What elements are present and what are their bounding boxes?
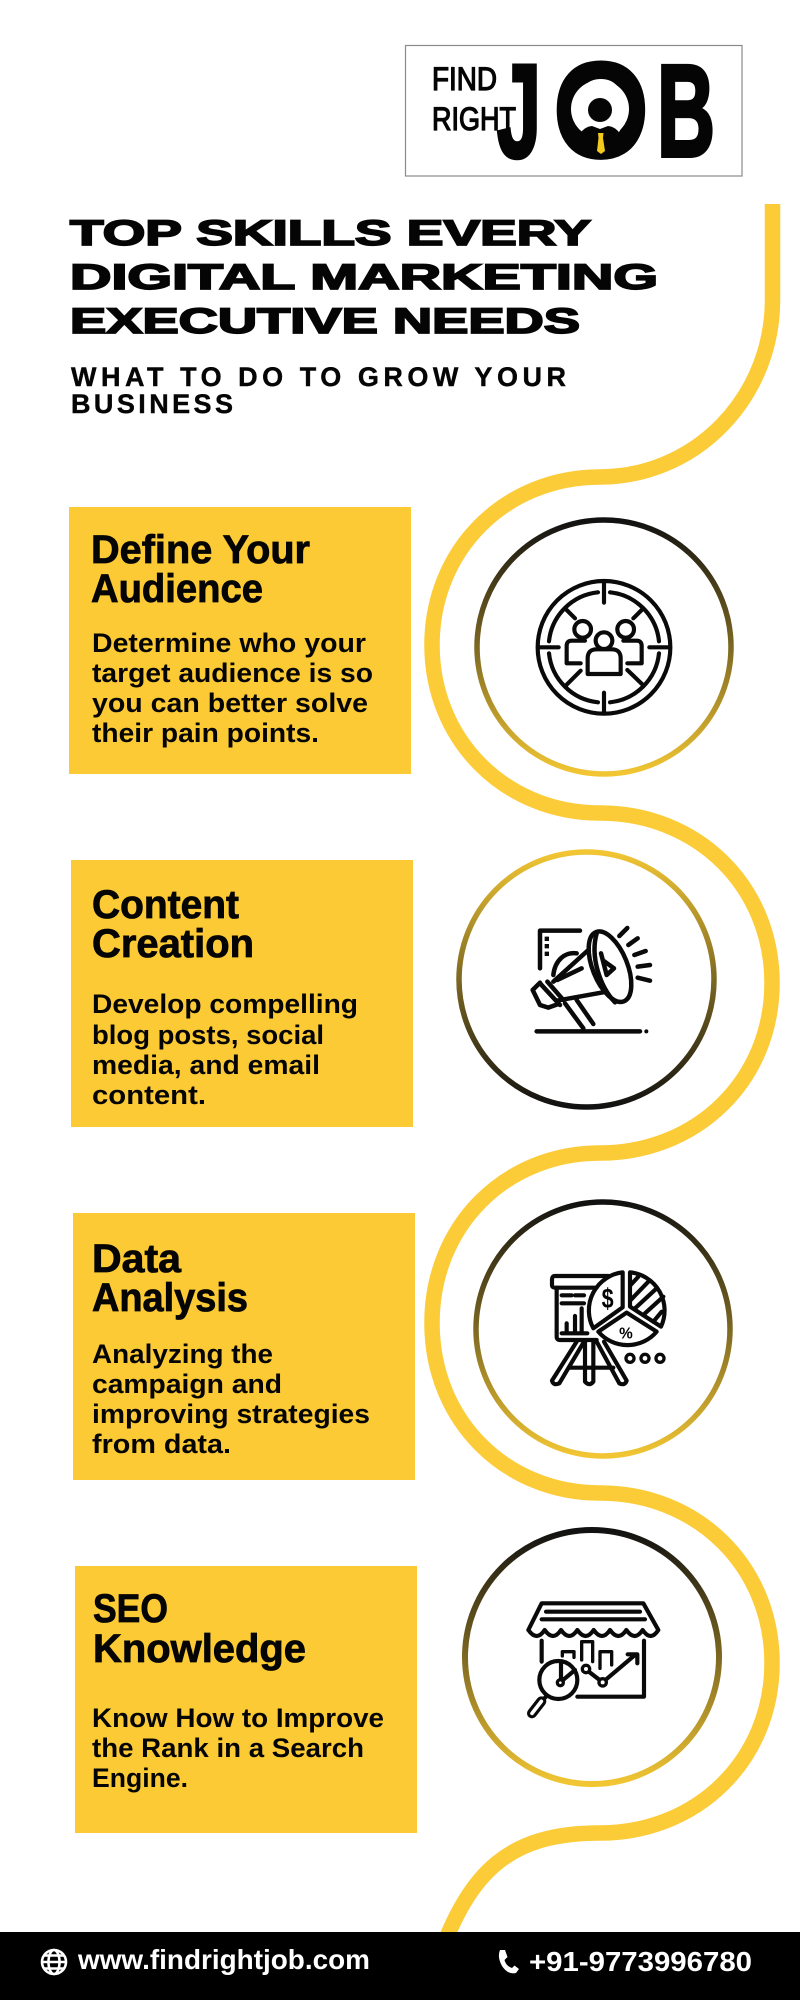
- circle: define your audience: [477, 520, 731, 774]
- body text: define your audience: you can better solve: [92, 688, 368, 718]
- logo wordmark: job: J: [497, 38, 541, 186]
- icon: phone: [499, 1950, 519, 1973]
- body text: content creation: blog posts, social: [92, 1020, 324, 1050]
- body text: define your audience: Determine who your: [92, 628, 367, 658]
- logo text: find right: [432, 61, 516, 137]
- body text: seo knowledge: the Rank in a Search: [92, 1733, 364, 1763]
- subtitle: WHAT TO DO TO GROW YOUR: [71, 362, 566, 392]
- body text: content creation: [92, 989, 358, 1110]
- body text: data analysis: [92, 1339, 370, 1459]
- body text: data analysis: from data.: [92, 1429, 231, 1459]
- icon: store with analytics: [528, 1603, 658, 1713]
- heading: content creation: [92, 883, 254, 966]
- body text: define your audience: target audience is so: [92, 658, 373, 688]
- body text: content creation: media, and email: [92, 1050, 320, 1080]
- logo wordmark: job: B: [657, 37, 715, 184]
- body text: data analysis: campaign and: [92, 1369, 282, 1399]
- body text: seo knowledge: Engine.: [92, 1763, 188, 1793]
- body text: seo knowledge: Know How to Improve: [92, 1703, 384, 1733]
- heading: data analysis: [92, 1237, 248, 1320]
- panel: data analysis: [73, 1213, 415, 1480]
- circle: seo knowledge: [465, 1530, 719, 1784]
- icon: target audience: [538, 581, 670, 714]
- circle: data analysis: [476, 1202, 730, 1456]
- panel: content creation: [71, 860, 413, 1127]
- title: EXECUTIVE NEEDS: [70, 302, 580, 341]
- heading: content creation: Content: [92, 883, 239, 927]
- icon: presentation board with pie chart: %: [619, 1325, 633, 1342]
- body text: define your audience: [92, 628, 373, 748]
- icon: presentation board with pie chart: $: [602, 1283, 614, 1314]
- heading: seo knowledge: Knowledge: [93, 1627, 306, 1671]
- body text: seo knowledge: [92, 1703, 384, 1793]
- subtitle: [71, 362, 566, 419]
- logo person with tie: [571, 80, 629, 156]
- body text: content creation: Develop compelling: [92, 989, 358, 1019]
- circle: content creation: [459, 852, 714, 1107]
- footer bar: [0, 1932, 800, 2000]
- title: TOP SKILLS EVERY: [70, 214, 591, 253]
- body text: data analysis: Analyzing the: [92, 1339, 273, 1369]
- logo text: find right: RIGHT: [432, 101, 516, 137]
- title: DIGITAL MARKETING: [70, 258, 658, 297]
- heading: content creation: Creation: [92, 922, 254, 966]
- website: www.findrightjob.com: [77, 1944, 370, 1975]
- panel: define your audience: [69, 507, 411, 774]
- panel: seo knowledge: [75, 1566, 417, 1833]
- logo wordmark: job: [497, 34, 715, 186]
- body text: content creation: content.: [92, 1080, 206, 1110]
- heading: seo knowledge: SEO: [93, 1587, 168, 1631]
- heading: define your audience: Define Your: [91, 528, 310, 572]
- subtitle: BUSINESS: [71, 389, 233, 419]
- heading: seo knowledge: [93, 1587, 306, 1671]
- body text: data analysis: improving strategies: [92, 1399, 370, 1429]
- heading: data analysis: Analysis: [92, 1276, 248, 1320]
- heading: data analysis: Data: [92, 1237, 182, 1281]
- winding yellow path: [432, 204, 772, 1960]
- logo text: find right: FIND: [432, 61, 497, 97]
- heading: define your audience: Audience: [91, 567, 263, 611]
- logo wordmark: job: O: [553, 34, 649, 186]
- icon: presentation board with pie chart: [552, 1272, 665, 1384]
- icon: globe: [42, 1950, 66, 1974]
- body text: define your audience: their pain points.: [92, 718, 319, 748]
- logo: [406, 34, 742, 186]
- icon: megaphone: [533, 926, 650, 1033]
- heading: define your audience: [91, 528, 310, 611]
- phone number: +91-9773996780: [529, 1946, 752, 1977]
- title: [70, 214, 658, 341]
